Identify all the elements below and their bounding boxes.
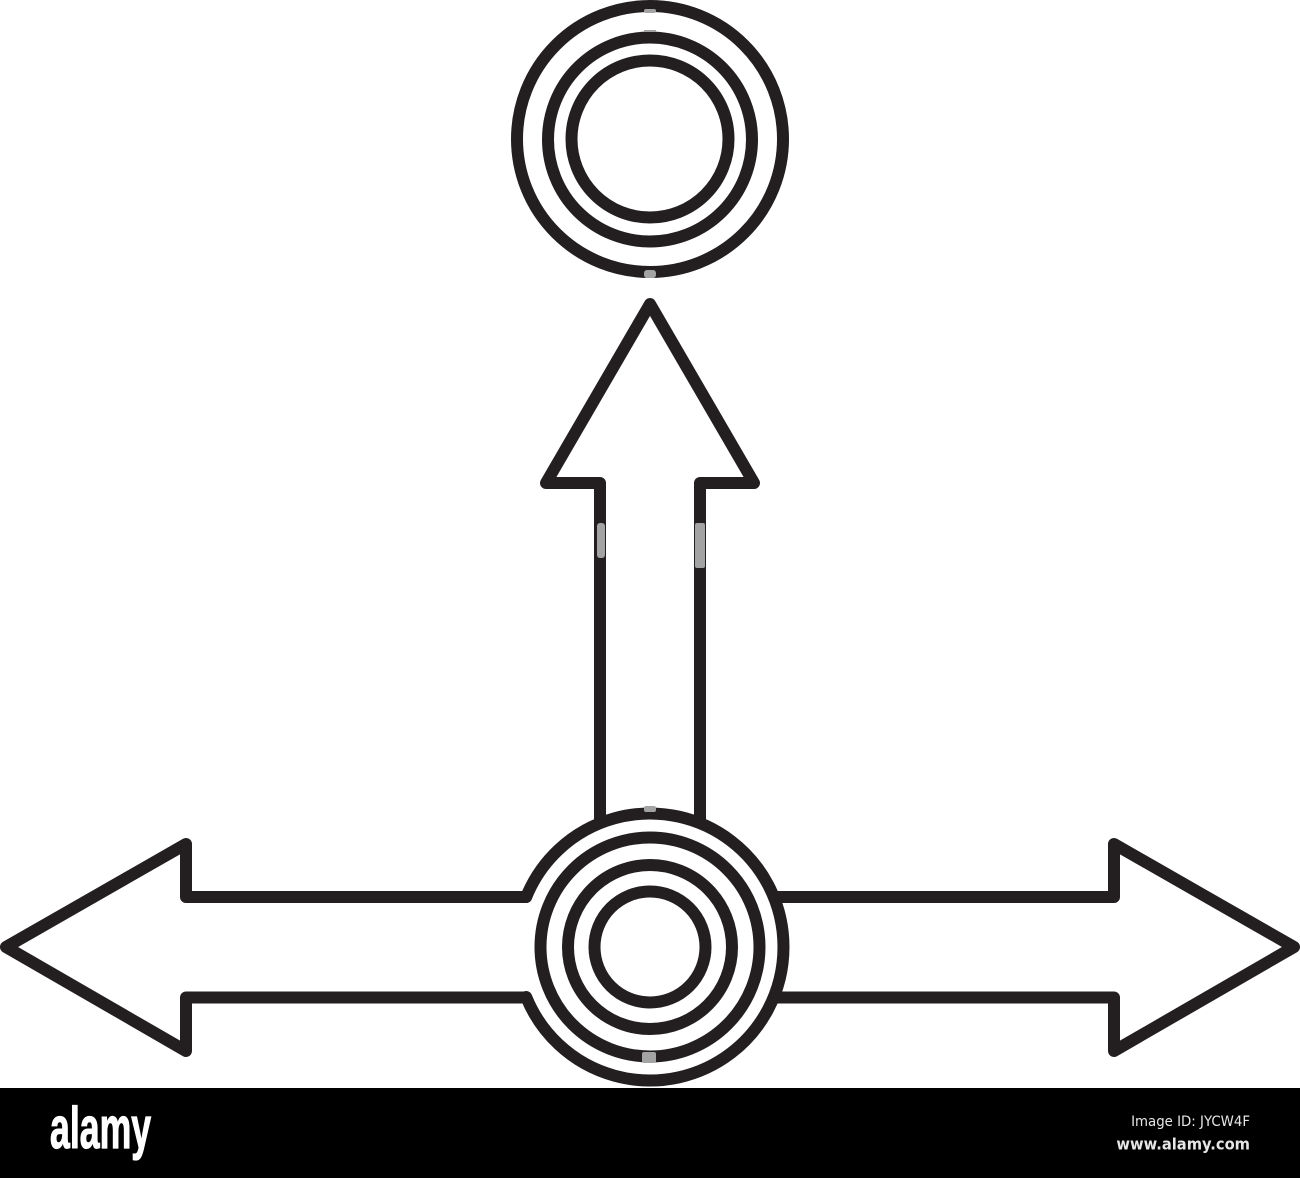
website text: www.alamy.com [1116, 1135, 1250, 1154]
watermark: alamy logo: alamy [50, 1096, 151, 1161]
footer bar [0, 1088, 1300, 1178]
image id text: Image ID: JYCW4F [1131, 1114, 1250, 1130]
arrow: upward [546, 304, 754, 822]
arrow: right [774, 844, 1294, 1051]
arrow: left [6, 844, 526, 1051]
icon: bottom concentric circles [526, 814, 783, 1080]
watermark traces on line art [597, 9, 705, 1063]
icon: top concentric circles [517, 6, 783, 272]
